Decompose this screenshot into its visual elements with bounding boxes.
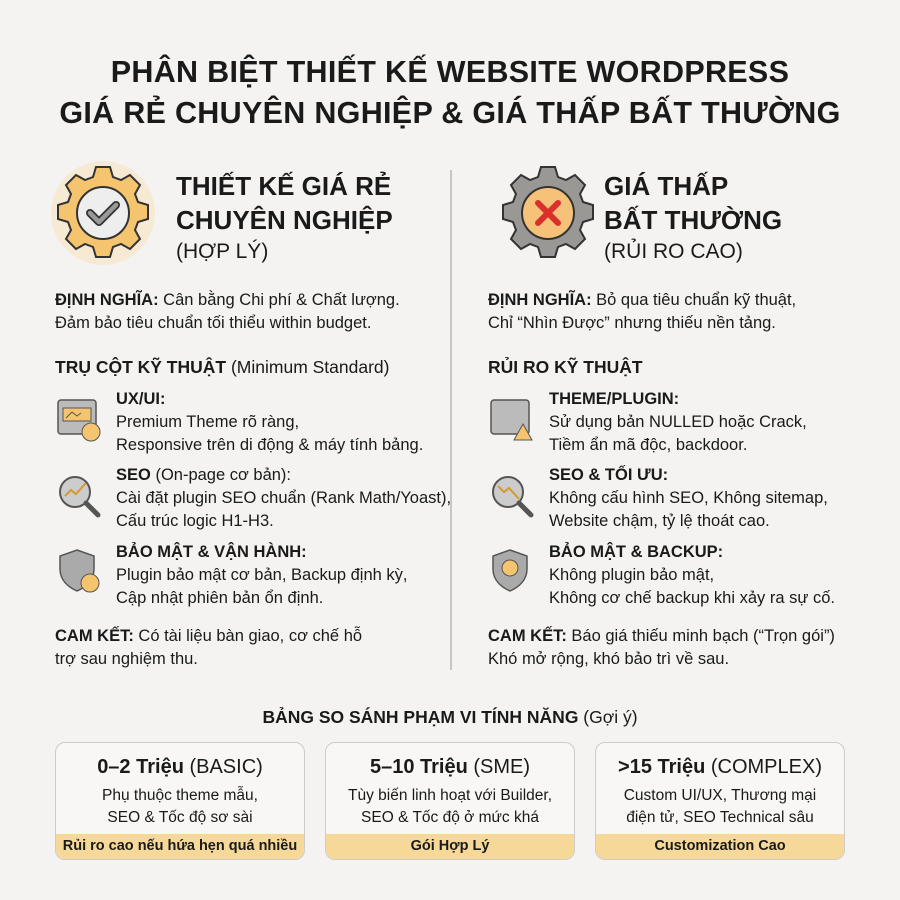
right heading: BẤT THƯỜNG xyxy=(604,205,782,235)
UX/UI text: Responsive trên di động & máy tính bảng. xyxy=(116,436,423,454)
left commitment: CAM KẾT: Có tài liệu bàn giao, cơ chế hỗ xyxy=(55,627,362,645)
left heading: CHUYÊN NGHIỆP xyxy=(176,205,393,235)
right commitment: CAM KẾT: Báo giá thiếu minh bạch (“Trọn gói”) xyxy=(488,627,835,645)
box: sme xyxy=(325,742,575,860)
left definition xyxy=(55,290,400,332)
SEO text: SEO (On-page cơ bản): xyxy=(116,466,291,484)
box: basic: SEO & Tốc độ sơ sài xyxy=(107,809,253,826)
box: sme: Tùy biến linh hoạt với Builder, xyxy=(348,787,552,804)
title: PHÂN BIỆT THIẾT KẾ WEBSITE WORDPRESS xyxy=(111,55,789,89)
box: basic: Rủi ro cao nếu hứa hẹn quá nhiều xyxy=(63,838,297,854)
SEO right text: SEO & TỐI ƯU: xyxy=(549,466,668,484)
box: complex: Customization Cao xyxy=(654,838,786,854)
security text: BẢO MẬT & VẬN HÀNH: xyxy=(116,543,307,561)
comparison heading: BẢNG SO SÁNH PHẠM VI TÍNH NĂNG (Gợi ý) xyxy=(262,707,638,727)
theme/plugin text xyxy=(549,390,807,454)
UX/UI text: Premium Theme rõ ràng, xyxy=(116,413,299,431)
SEO text xyxy=(116,466,451,530)
right definition: ĐỊNH NGHĨA: Bỏ qua tiêu chuẩn kỹ thuật, xyxy=(488,291,796,309)
right commitment xyxy=(488,626,835,668)
title xyxy=(59,54,841,130)
theme/plugin text: Tiềm ẩn mã độc, backdoor. xyxy=(549,436,747,454)
icon: seo magnifier xyxy=(59,476,100,518)
box: basic xyxy=(55,742,305,860)
security text xyxy=(116,542,408,607)
title: GIÁ RẺ CHUYÊN NGHIỆP & GIÁ THẤP BẤT THƯỜNG xyxy=(59,96,841,130)
security text: Plugin bảo mật cơ bản, Backup định kỳ, xyxy=(116,566,408,584)
right definition xyxy=(488,290,796,332)
divider xyxy=(450,170,452,670)
left definition: Đảm bảo tiêu chuẩn tối thiểu within budget. xyxy=(55,314,371,332)
left commitment: trợ sau nghiệm thu. xyxy=(55,650,198,668)
box: complex: điện tử, SEO Technical sâu xyxy=(626,809,814,826)
right heading: GIÁ THẤP xyxy=(604,171,728,201)
right section heading: RỦI RO KỸ THUẬT xyxy=(488,357,643,377)
box: complex xyxy=(595,742,845,860)
box: sme: 5–10 Triệu (SME) xyxy=(370,756,530,778)
icon: shield xyxy=(59,549,100,592)
icon: check gear xyxy=(51,161,155,265)
left heading xyxy=(176,171,393,263)
box: basic: 0–2 Triệu (BASIC) xyxy=(97,756,263,778)
theme/plugin text: THEME/PLUGIN: xyxy=(549,390,679,408)
box: complex: Custom UI/UX, Thương mại xyxy=(624,787,816,804)
backup text: BẢO MẬT & BACKUP: xyxy=(549,543,723,561)
box: complex: >15 Triệu (COMPLEX) xyxy=(618,756,822,778)
backup text: Không plugin bảo mật, xyxy=(549,566,714,584)
left section heading: TRỤ CỘT KỸ THUẬT (Minimum Standard) xyxy=(55,357,390,377)
theme/plugin text: Sử dụng bản NULLED hoặc Crack, xyxy=(549,413,807,431)
box: sme: SEO & Tốc độ ở mức khá xyxy=(361,809,539,826)
SEO text: Cài đặt plugin SEO chuẩn (Rank Math/Yoast), xyxy=(116,489,451,507)
SEO text: Cấu trúc logic H1-H3. xyxy=(116,512,274,530)
UX/UI text xyxy=(116,390,423,454)
backup text: Không cơ chế backup khi xảy ra sự cố. xyxy=(549,589,835,607)
left heading: THIẾT KẾ GIÁ RẺ xyxy=(176,171,391,201)
SEO right text xyxy=(549,465,828,530)
icon: seo magnifier right xyxy=(492,476,534,518)
SEO right text: Không cấu hình SEO, Không sitemap, xyxy=(549,489,828,507)
left commitment xyxy=(55,626,362,668)
backup text xyxy=(549,542,835,607)
icon: cross gear xyxy=(502,166,594,258)
right heading xyxy=(604,171,782,263)
security text: Cập nhật phiên bản ổn định. xyxy=(116,589,323,607)
right heading: (RỦI RO CAO) xyxy=(604,240,743,263)
left heading: (HỢP LÝ) xyxy=(176,240,268,263)
SEO right text: Website chậm, tỷ lệ thoát cao. xyxy=(549,512,770,530)
icon: browser warning xyxy=(490,399,533,440)
left definition: ĐỊNH NGHĨA: Cân bằng Chi phí & Chất lượng. xyxy=(55,291,400,309)
icon: shield right xyxy=(492,549,528,592)
UX/UI text: UX/UI: xyxy=(116,390,166,408)
box: basic: Phụ thuộc theme mẫu, xyxy=(102,787,258,804)
right commitment: Khó mở rộng, khó bảo trì về sau. xyxy=(488,650,729,668)
icon: browser xyxy=(57,399,100,442)
box: sme: Gói Hợp Lý xyxy=(411,838,489,854)
right definition: Chỉ “Nhìn Được” nhưng thiếu nền tảng. xyxy=(488,314,776,332)
